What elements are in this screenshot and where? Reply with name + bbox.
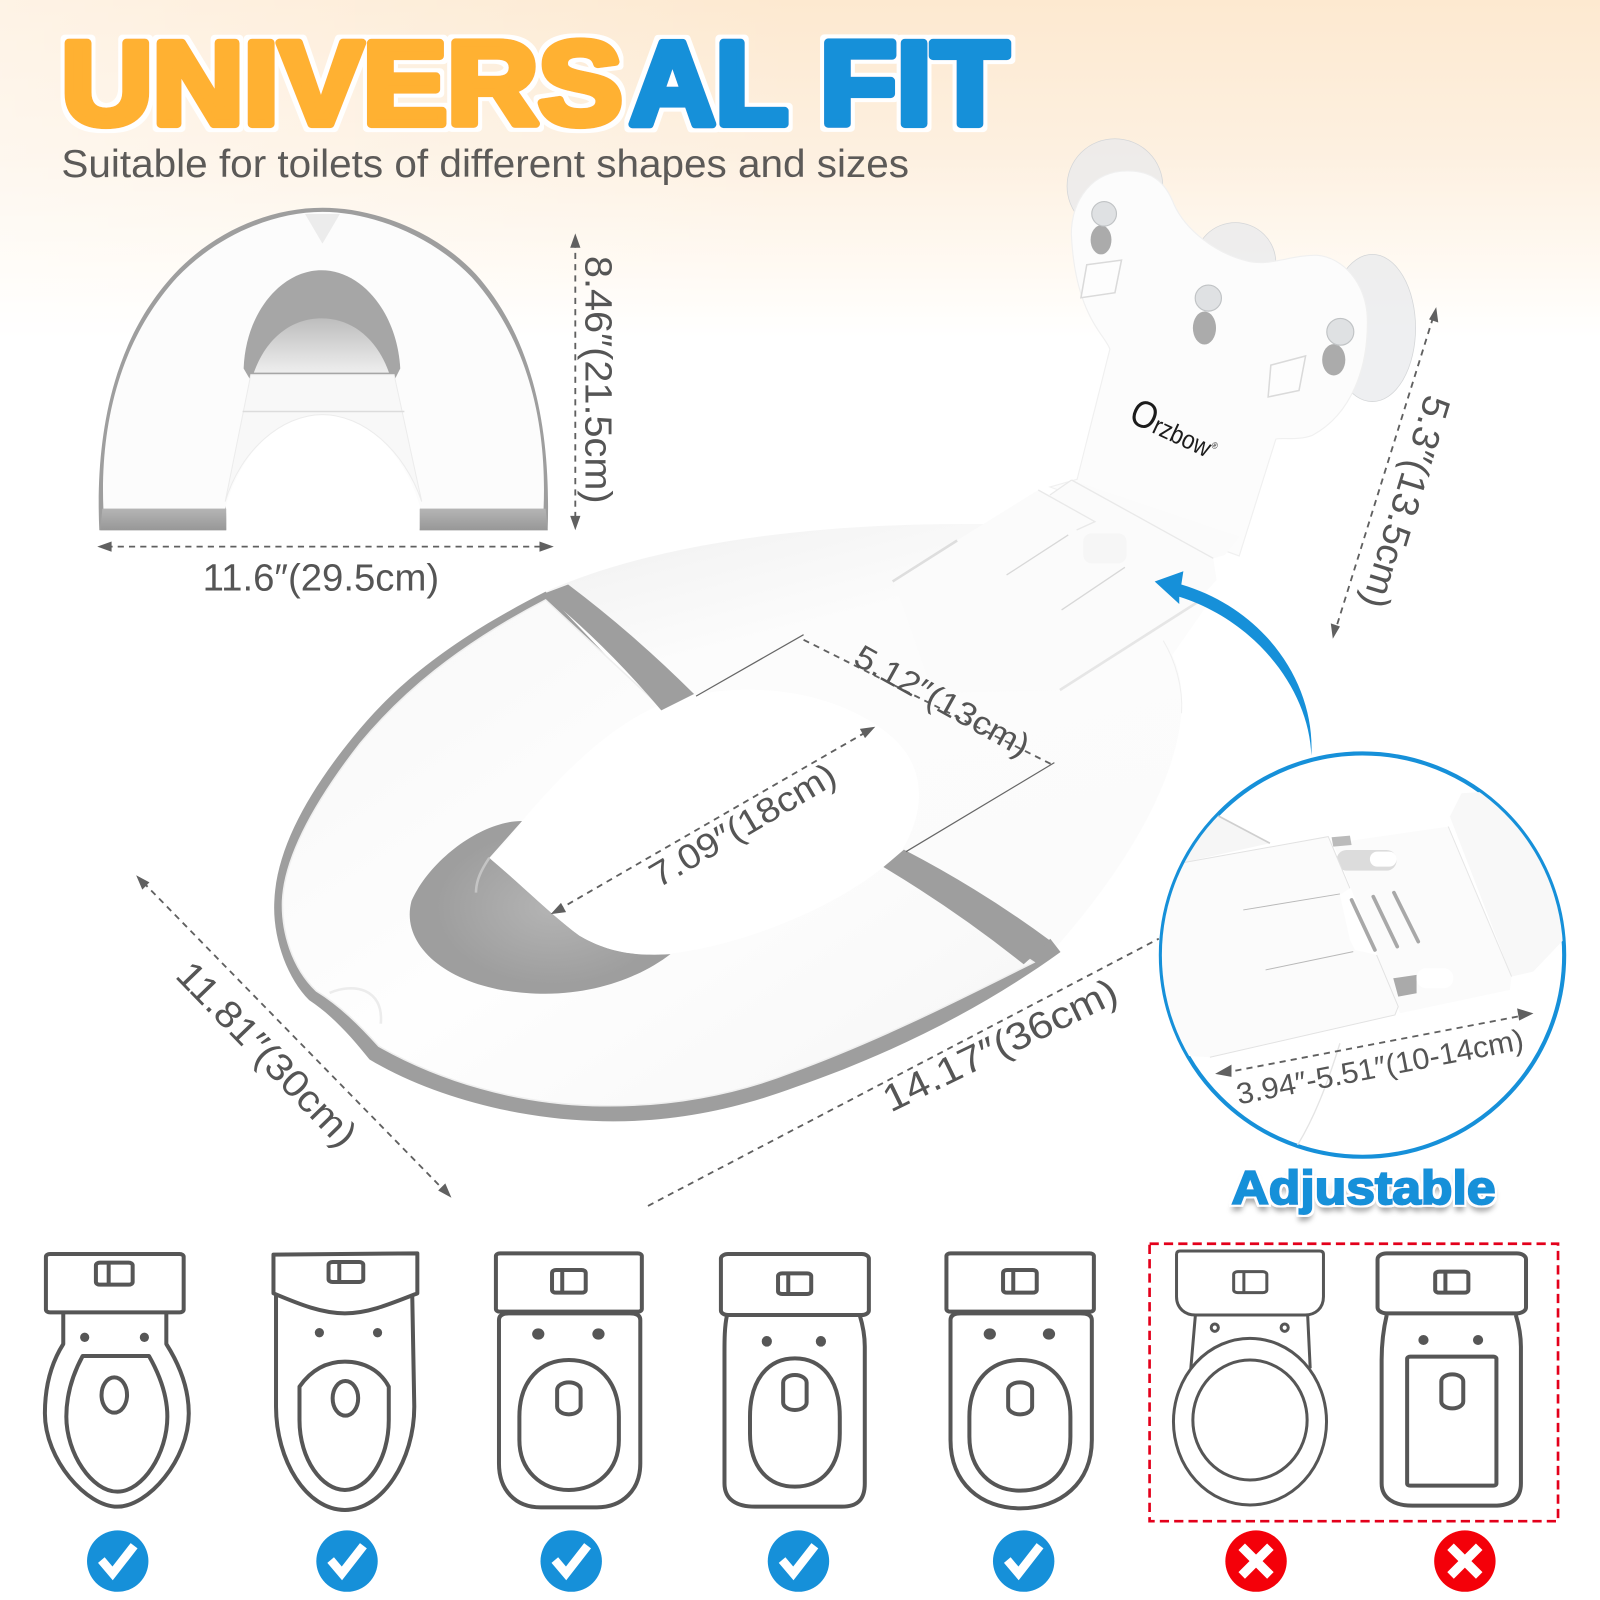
sliding tabs bbox=[1332, 836, 1417, 997]
toilet 5 bbox=[946, 1253, 1094, 1508]
brand logo: Orzbow bbox=[1123, 390, 1224, 467]
dimension: height 8.46: 8.46″(21.5cm) bbox=[577, 256, 619, 504]
keyhole slots bbox=[1091, 225, 1345, 376]
dimension: height 8.46 bbox=[570, 233, 619, 530]
cross icons row bbox=[1225, 1530, 1496, 1592]
seat opening bbox=[489, 690, 919, 955]
seat padded surface bbox=[282, 600, 1034, 1106]
dimension: bracket 5.3 bbox=[1331, 307, 1458, 639]
dimension: opening length 7.09 bbox=[551, 727, 875, 914]
front slide bbox=[1162, 858, 1342, 1056]
toilet 7 unsuitable square bbox=[1378, 1253, 1526, 1506]
dimension: opening width 5.12: 5.12″(13cm) bbox=[848, 637, 1036, 764]
title: AL bbox=[630, 17, 788, 149]
subtitle: Suitable for toilets of different shapes and sizes bbox=[61, 143, 909, 186]
clips bbox=[1081, 260, 1306, 397]
suction knobs bbox=[1092, 202, 1354, 345]
background gradient bbox=[0, 0, 1600, 338]
rear tray bbox=[1333, 827, 1512, 1013]
dimension: seat width 11.81: 11.81″(30cm) bbox=[168, 954, 365, 1156]
dimension: width 11.6 bbox=[97, 542, 554, 600]
title: UNIVERS bbox=[61, 17, 622, 149]
toilet 2 bbox=[273, 1253, 417, 1510]
slide tray bbox=[893, 480, 1240, 713]
seat upper white surface bbox=[546, 524, 1208, 947]
toilet 6 unsuitable round bbox=[1173, 1251, 1327, 1505]
suction-cup wall bracket bbox=[1050, 139, 1416, 556]
vent slits bbox=[1352, 893, 1418, 950]
title: FIT bbox=[820, 17, 1008, 149]
grey scoop bbox=[410, 821, 671, 994]
grey strap top bbox=[544, 585, 694, 710]
check icons row bbox=[87, 1530, 1054, 1592]
adjustment range arrow and label: 3.94″-5.51″(10-14cm) bbox=[1234, 1023, 1526, 1111]
brand logo: ® bbox=[1210, 440, 1220, 451]
dimension: seat length 14.17: 14.17″(36cm) bbox=[876, 971, 1125, 1121]
adjustable detail circle bbox=[1133, 753, 1567, 1157]
seat corner bbox=[1184, 816, 1268, 862]
suction cups bbox=[1067, 139, 1416, 402]
adjustable label: Adjustable bbox=[1231, 1161, 1496, 1214]
dimension: bracket 5.3: 5.3″(13.5cm) bbox=[1353, 390, 1458, 613]
red dashed unsuitable box bbox=[1150, 1244, 1558, 1521]
seat slots and corner crease bbox=[330, 540, 957, 1024]
dimension: opening width 5.12 bbox=[696, 635, 1054, 852]
back flap bbox=[1478, 792, 1563, 942]
dimension: width 11.6: 11.6″(29.5cm) bbox=[203, 558, 439, 600]
potty seat main view bbox=[274, 480, 1240, 1121]
seat base rim bbox=[274, 592, 1061, 1121]
blue curved arrow bbox=[1155, 571, 1312, 755]
toilet 3 bbox=[496, 1253, 642, 1507]
title bbox=[61, 17, 1008, 149]
dimension: opening length 7.09: 7.09″(18cm) bbox=[642, 755, 843, 895]
grey strap bottom bbox=[883, 850, 1050, 964]
dimension: seat width 11.81 bbox=[136, 875, 451, 1198]
toilet 4 bbox=[721, 1254, 869, 1507]
folded seat product image bbox=[99, 208, 548, 530]
toilet 1 bbox=[45, 1254, 189, 1507]
dimension: seat length 14.17 bbox=[648, 939, 1159, 1206]
bracket plate bbox=[1050, 171, 1367, 556]
